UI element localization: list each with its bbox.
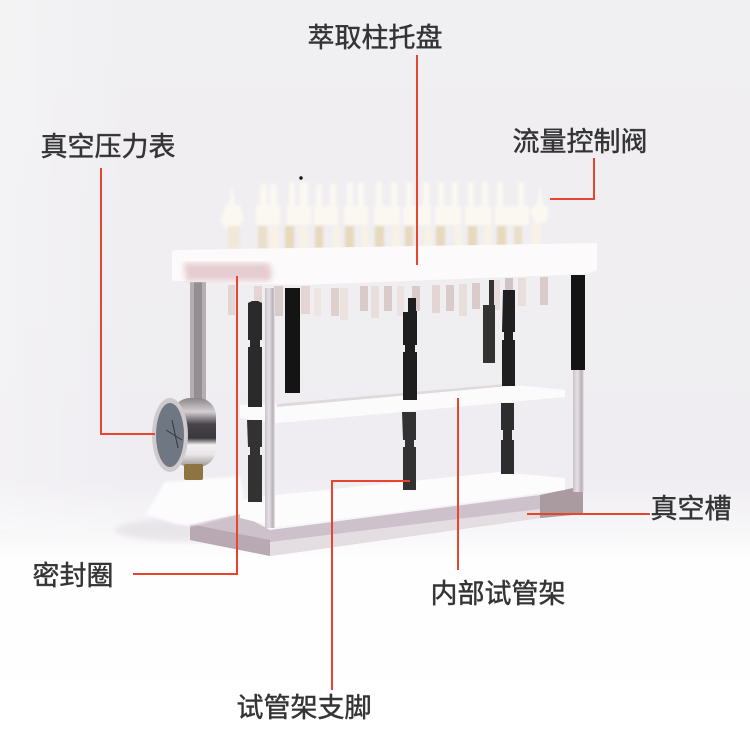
label: vacuum chamber: 真空槽 [650,494,732,524]
dust speck [299,176,303,180]
leader: flow valve [550,158,594,199]
label: rack foot: 试管架支脚 [236,693,372,723]
rack feet and black spacers [247,275,585,502]
column tips under tray [228,277,548,320]
label: seal ring: 密封圈 [32,561,114,591]
leader: vacuum chamber [527,513,650,515]
flow control valves [220,182,549,249]
leader lines [101,55,650,690]
lower shelf [240,472,565,527]
extraction manifold illustration [146,176,597,556]
label: vacuum gauge: 真空压力表 [40,132,176,162]
right clear pillar [573,370,584,492]
leader: rack foot [332,481,410,690]
leader: gauge [101,168,155,434]
white tubing [146,476,245,526]
label: inner test tube rack: 内部试管架 [430,579,566,609]
label: flow control valve: 流量控制阀 [512,127,648,157]
base block [190,488,583,556]
middle shelf [240,384,565,423]
leader: seal ring [133,276,237,574]
front clear pillar [265,288,275,528]
back clear pillar [190,282,206,400]
vacuum pressure gauge [152,398,216,480]
label: extraction column tray: 萃取柱托盘 [308,23,442,53]
leader: extraction tray [416,55,418,265]
extraction column tray [172,243,597,285]
leader: inner rack [457,398,459,570]
